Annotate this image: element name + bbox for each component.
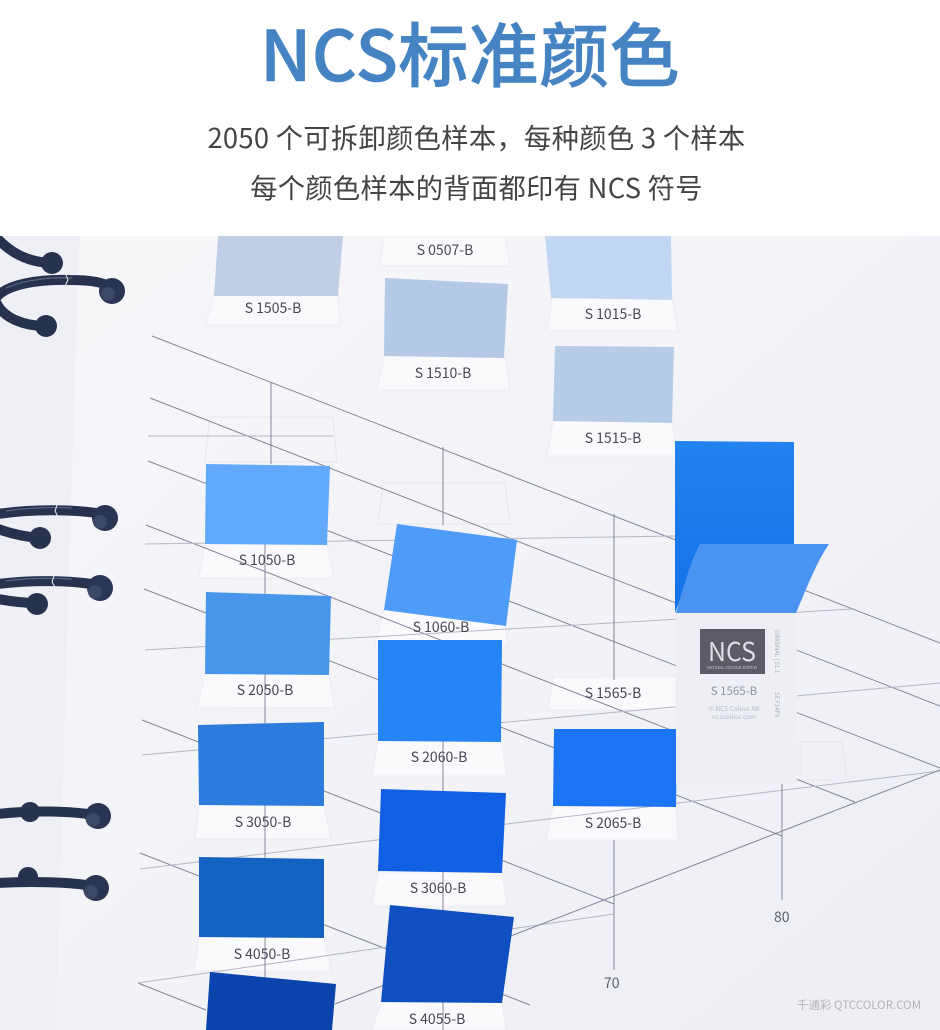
swatch: S 2050-B: S 2050-B — [237, 680, 293, 700]
swatch: S 1015-B — [545, 236, 672, 324]
swatch: S 4050-B — [199, 857, 324, 964]
featured sample: S 1565-B opened card — [675, 441, 829, 784]
swatch label: S 1565-B: S 1565-B — [585, 683, 641, 703]
swatch: S 1505-B: S 1505-B — [245, 298, 301, 318]
swatch: S 2060-B — [378, 640, 502, 767]
faint empty card outlines — [205, 417, 847, 780]
swatch: S 3060-B — [378, 789, 506, 898]
swatch: S 2050-B — [205, 592, 331, 700]
swatch: S 1515-B: S 1515-B — [585, 428, 641, 448]
swatch: S 1505-B — [214, 236, 343, 318]
featured sample: S 1565-B opened card: ORIGINAL | S1.1 — [773, 630, 782, 673]
axis numbers: 80 — [774, 907, 790, 927]
binder ring 4 — [0, 802, 111, 829]
featured sample: S 1565-B opened card: ncscolour.com — [712, 711, 756, 721]
binder ring 5 — [0, 867, 109, 901]
swatch: S 4055-B: S 4055-B — [409, 1009, 465, 1029]
binder ring 1 — [0, 239, 125, 337]
binder ring 2 — [0, 505, 118, 549]
title: NCS标准颜色 — [260, 1, 680, 102]
NCS logo block: NCS — [708, 632, 756, 669]
NCS logo block — [700, 629, 765, 674]
NCS logo block: NATURAL COLOUR SYSTEM — [707, 665, 757, 671]
swatch: S 1510-B — [384, 278, 508, 383]
folded colour flap — [676, 544, 829, 613]
diagram lines — [138, 336, 940, 1030]
white card — [676, 613, 797, 784]
background paper — [0, 236, 940, 1030]
swatch: S 1050-B — [205, 464, 330, 570]
swatch label: S 0507-B: S 0507-B — [417, 240, 473, 260]
swatch: S 1015-B: S 1015-B — [585, 304, 641, 324]
swatch: S 1060-B — [384, 524, 517, 637]
back colour sheet — [675, 441, 794, 613]
featured sample: S 1565-B opened card: © NCS Colour AB — [709, 703, 759, 713]
swatch: S 1060-B: S 1060-B — [413, 617, 469, 637]
watermark: 千通彩 QTCCOLOR.COM — [797, 997, 921, 1013]
featured sample: S 1565-B opened card: SE F14PX — [773, 692, 782, 718]
swatch: S 1515-B — [553, 346, 674, 448]
subtitle line 1: 2050 个可拆卸颜色样本，每种颜色 3 个样本 — [207, 116, 746, 156]
featured sample: S 1565-B opened card: S 1565-B — [711, 683, 758, 699]
swatch: S 2060-B: S 2060-B — [411, 747, 467, 767]
axis numbers: 70 — [604, 973, 620, 993]
swatch: S 1050-B: S 1050-B — [239, 550, 295, 570]
swatch: S 2065-B — [553, 729, 677, 833]
swatch: dark blue cut off — [206, 972, 336, 1030]
swatch: S 3050-B: S 3050-B — [235, 812, 291, 832]
swatch: S 1510-B: S 1510-B — [415, 363, 471, 383]
binder ring 3 — [0, 575, 113, 615]
swatch: S 4055-B — [381, 905, 514, 1029]
subtitle line 2: 每个颜色样本的背面都印有 NCS 符号 — [250, 166, 703, 206]
swatch: S 3060-B: S 3060-B — [410, 878, 466, 898]
swatch: S 2065-B: S 2065-B — [585, 813, 641, 833]
white label tabs — [194, 236, 678, 1030]
swatch: S 3050-B — [198, 722, 324, 832]
axis numbers — [604, 907, 790, 993]
header panel — [0, 0, 940, 236]
swatch: S 4050-B: S 4050-B — [234, 944, 290, 964]
